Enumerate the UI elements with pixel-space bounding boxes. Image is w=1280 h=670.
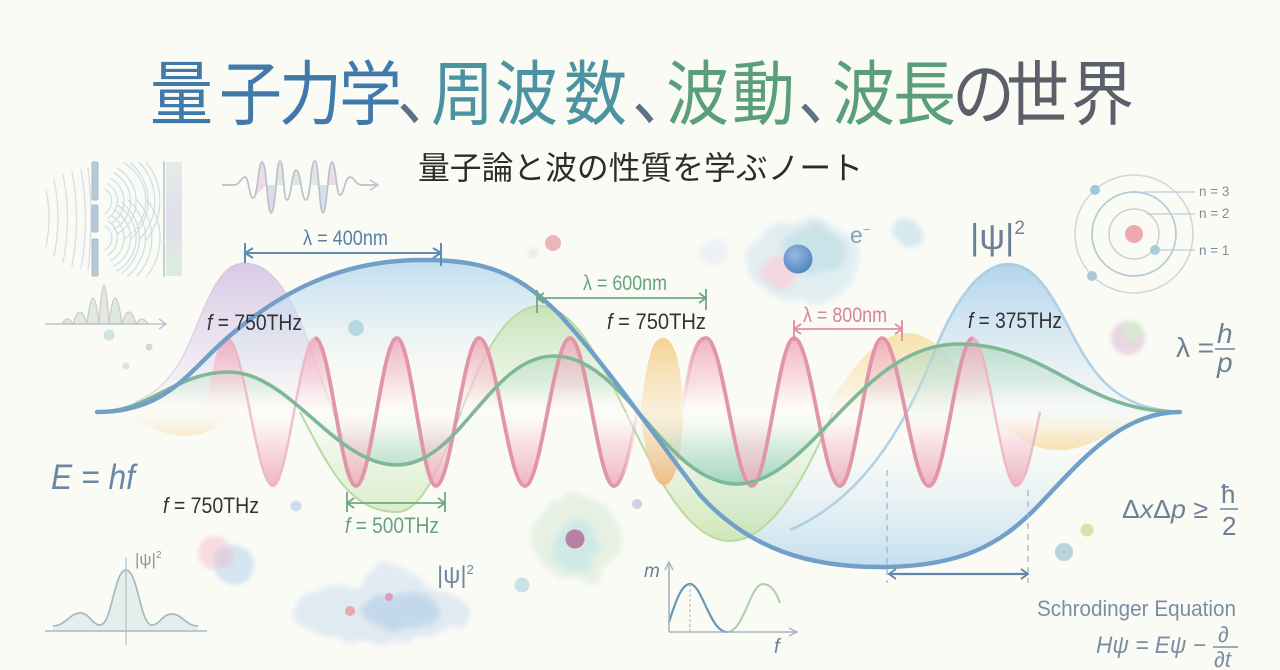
blue wave stroke [97,260,1180,567]
label: f 750THz upper left: f = 750THz [207,310,302,335]
formula: Schrodinger: ∂ [1218,622,1229,647]
m-f plot: m [644,561,660,582]
cloud with particles [290,567,470,641]
formula: de Broglie: h [1217,318,1233,349]
label: f 375THz: f = 375THz [968,308,1062,333]
label: psi squared cloud: 2 [467,562,474,577]
title: 波動 [666,56,795,135]
colour blob right [1111,321,1145,355]
yellow shape left [97,408,245,436]
icon: diffraction pattern [45,285,166,329]
green wave fill [97,344,1180,484]
pink wave fill right [680,338,1040,486]
main wave diagram [97,260,1180,567]
electron sphere [784,244,812,274]
lambda 400nm dimension [245,243,441,266]
formula: de Broglie: p [1216,347,1233,378]
label: lambda 800nm: λ = 800nm [803,304,887,327]
lambda 600nm dimension [537,289,706,313]
small probability plot: 2 [156,550,162,561]
formula: de Broglie: λ = [1176,332,1214,363]
orange lens [640,338,683,485]
atom diagram [1075,175,1229,293]
title: 周波数 [431,56,627,135]
yellow shape right [819,333,1175,450]
lower blue fill [650,412,1180,567]
title: 量子力学 [150,56,402,135]
title: 、 [397,56,460,135]
pink blue blob [198,536,254,585]
blue bell outline [790,264,1170,530]
atom diagram: n = 1 [1199,243,1229,258]
atom diagram: n = 3 [1199,184,1229,199]
pink wave stroke strong right [682,338,973,486]
large light green wave [300,306,833,541]
pink wave stroke strong left [315,338,640,486]
atom blob center bottom [535,494,619,582]
formula: de Broglie [1176,318,1235,378]
blue bell curve [892,264,1170,440]
lambda 800nm dimension [794,320,902,341]
pink wave fill left [205,338,640,486]
formula: E = hf: E = hf [51,458,138,497]
formula: uncertainty [1122,479,1238,541]
title: 波長 [832,56,956,135]
formula: uncertainty: ħ [1221,479,1235,509]
label: f 750THz center: f = 750THz [607,309,706,334]
m-f plot: f [774,636,782,658]
subtitle: 量子論と波の性質を学ぶノート [418,150,863,186]
upper blue fill [140,260,635,410]
large green wave outline [300,306,833,541]
small probability plot [45,550,207,645]
title [150,56,1134,135]
icon: wave packet [222,161,378,213]
title: 、 [798,56,861,135]
label: lambda 400nm: λ = 400nm [303,227,388,250]
atom diagram: n = 2 [1199,206,1229,221]
green wave stroke [97,344,1180,484]
label: psi squared top: |ψ| [970,216,1014,257]
formula: Schrodinger [1037,596,1238,670]
title: 、 [632,56,695,135]
formula: uncertainty: 2 [1222,511,1236,541]
electron cloud top [700,219,921,300]
small probability plot: |ψ| [135,550,156,569]
pale purple bell [105,263,335,412]
label: psi squared cloud: |ψ| [437,562,467,589]
purple bell outline [135,263,365,480]
formula: uncertainty: ΔxΔp ≥ [1122,494,1208,524]
label: psi squared top: 2 [1014,218,1025,239]
m-f plot [644,561,797,658]
label: electron: e [850,222,863,248]
pink wave stroke faint [227,338,1040,486]
label: lambda 600nm: λ = 600nm [583,272,667,295]
uncertainty dimension [887,470,1028,583]
label: f 500THz: f = 500THz [345,513,439,538]
decorative dots [104,235,1094,592]
title: の世界 [952,56,1134,135]
label: electron: − [863,222,870,237]
icon: double slit interference [46,162,182,276]
label: f 750THz lower left: f = 750THz [163,493,259,518]
formula: Schrodinger: Schrodinger Equation [1037,596,1236,621]
f 500THz dimension [347,492,445,512]
formula: Schrodinger: Hψ = Eψ − [1096,632,1206,659]
